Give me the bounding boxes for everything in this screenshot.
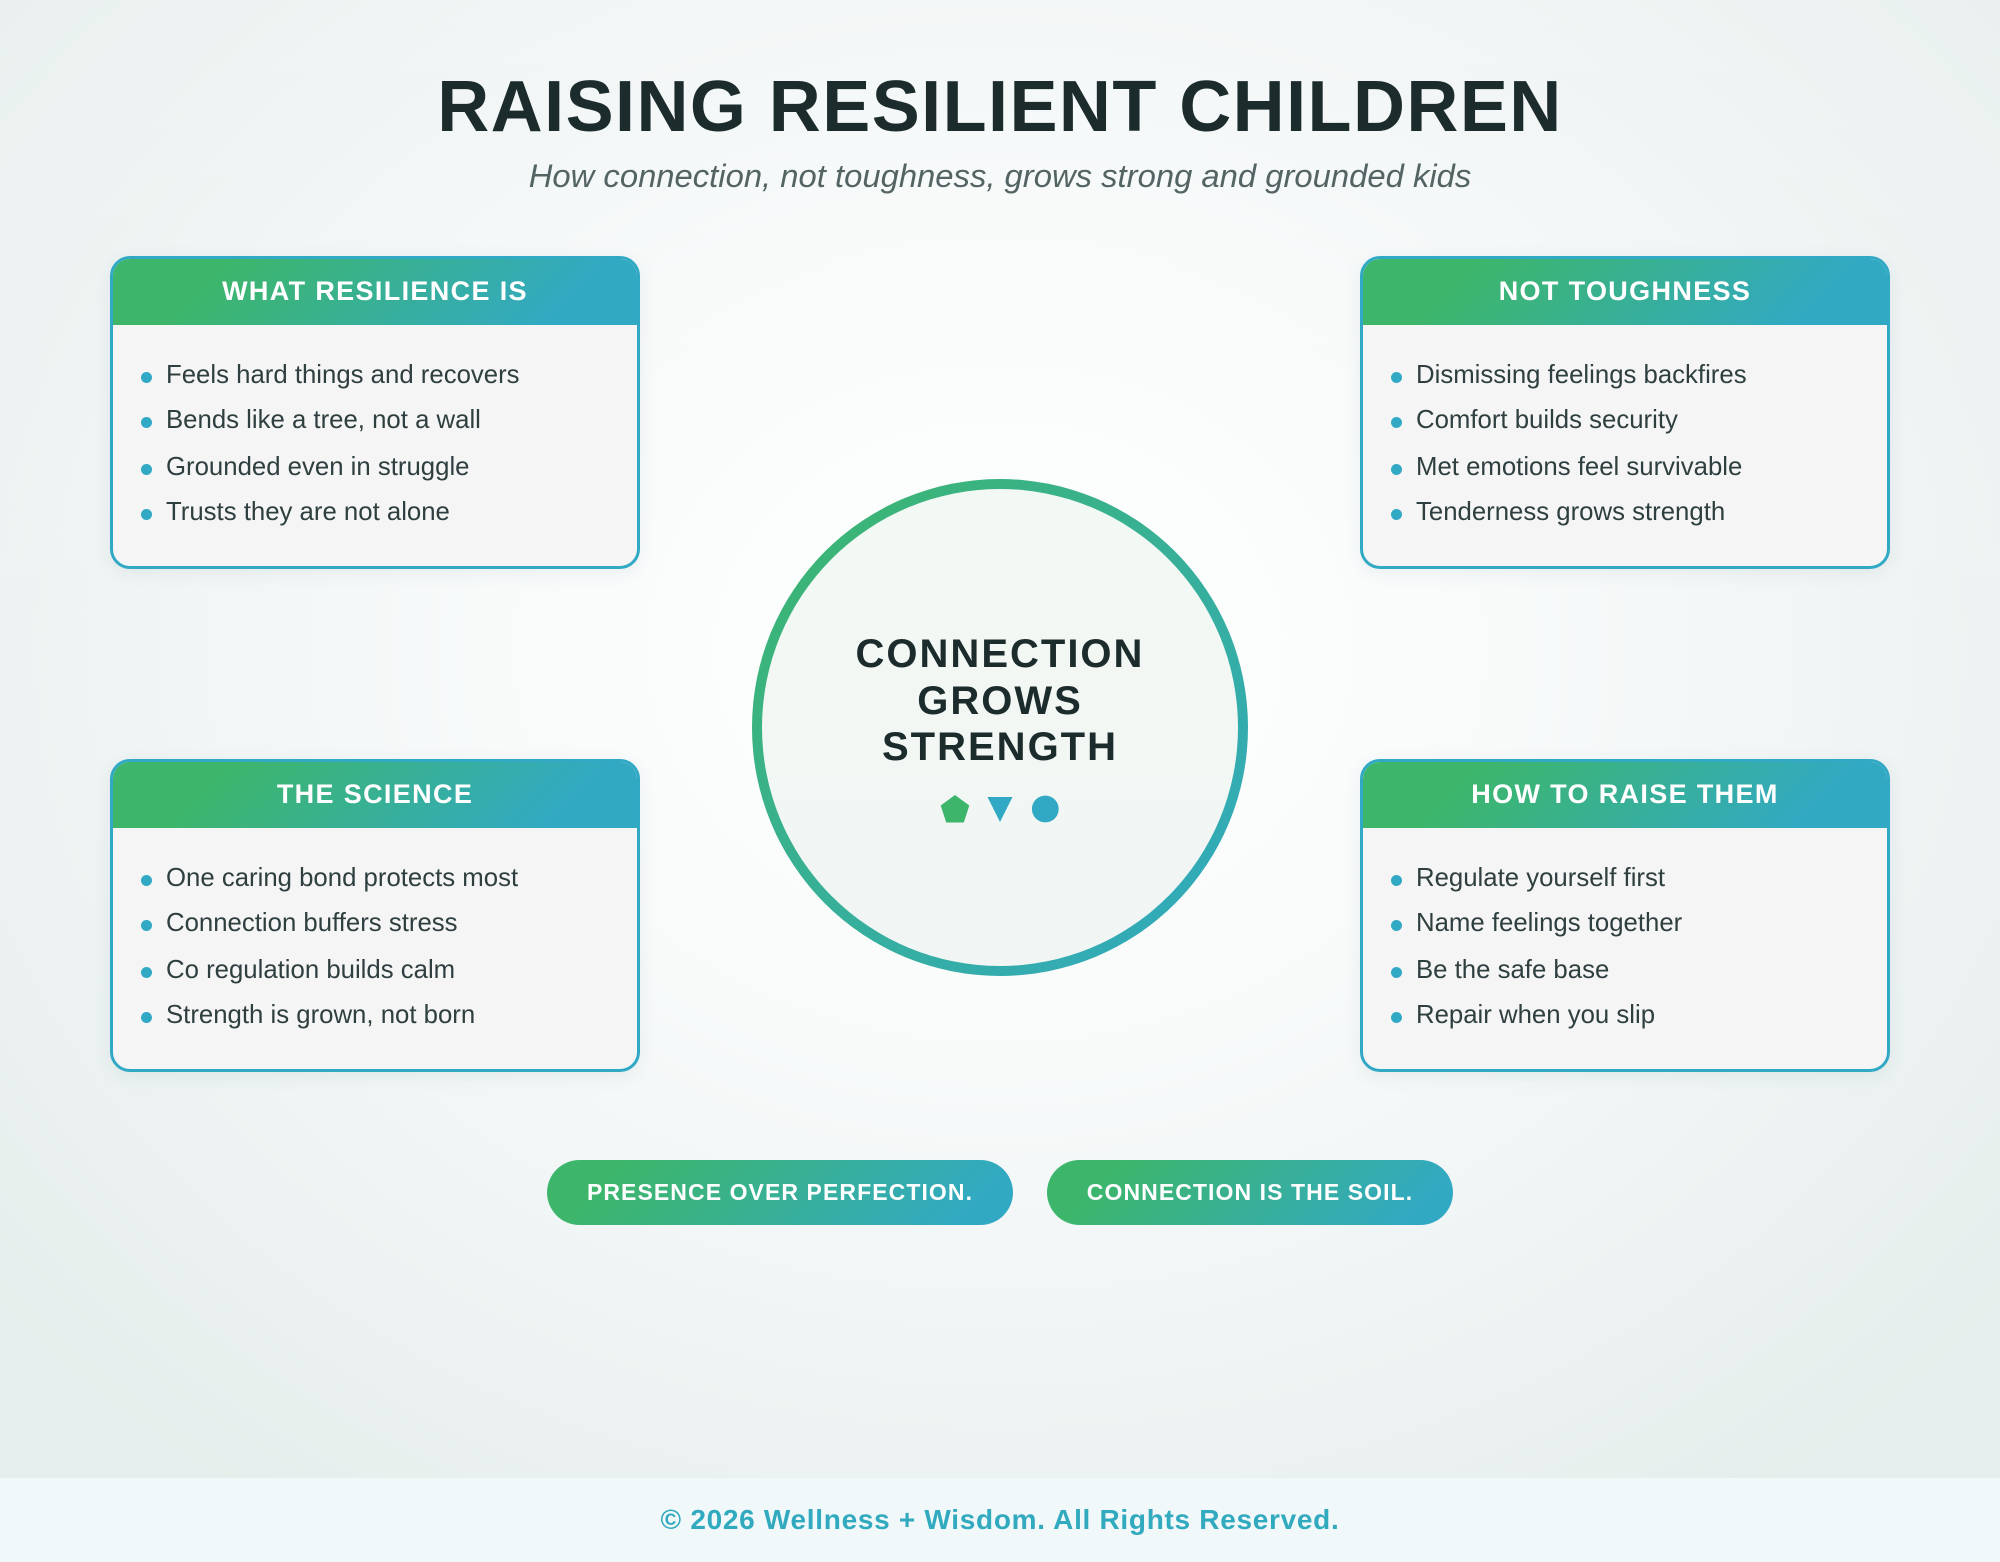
center text: CONNECTION	[856, 632, 1144, 676]
callout pill: presence over perfection	[547, 1160, 1013, 1225]
heading: the science: THE SCIENCE	[277, 779, 473, 809]
list item: Tenderness grows strength	[1416, 498, 1725, 526]
list item: Regulate yourself first	[1416, 864, 1665, 892]
list item: Bends like a tree, not a wall	[166, 406, 481, 434]
subtitle: How connection, not toughness, grows strong and grounded kids	[529, 157, 1471, 194]
list item: Met emotions feel survivable	[1416, 453, 1742, 481]
list item: Co regulation builds calm	[166, 956, 455, 984]
list item: Dismissing feelings backfires	[1416, 361, 1747, 389]
panel: how to raise them	[1360, 759, 1890, 1072]
list item: Strength is grown, not born	[166, 1001, 475, 1029]
center text: GROWS	[917, 678, 1083, 722]
list item: Trusts they are not alone	[166, 498, 450, 526]
list item: Repair when you slip	[1416, 1001, 1655, 1029]
title: RAISING RESILIENT CHILDREN	[437, 67, 1563, 147]
heading: what resilience is	[113, 259, 637, 325]
callout pill: connection is the soil: CONNECTION IS THE SOIL.	[1087, 1179, 1413, 1205]
list item: Feels hard things and recovers	[166, 361, 520, 389]
panel: not toughness	[1360, 256, 1890, 568]
list item: Comfort builds security	[1416, 406, 1678, 434]
heading: how to raise them	[1363, 762, 1887, 828]
footer	[0, 1478, 2000, 1562]
footer: © 2026 Wellness + Wisdom. All Rights Reserved.	[661, 1504, 1339, 1535]
icons: pentagon, triangle, circle	[940, 795, 1059, 822]
heading: how to raise them: HOW TO RAISE THEM	[1471, 779, 1779, 809]
center text: STRENGTH	[882, 725, 1118, 769]
list item: One caring bond protects most	[166, 864, 518, 892]
panel: the science	[110, 759, 640, 1072]
list item: Name feelings together	[1416, 909, 1682, 937]
list item: Grounded even in struggle	[166, 453, 469, 481]
list item: Connection buffers stress	[166, 909, 458, 937]
heading: not toughness	[1363, 259, 1887, 325]
central circle	[752, 479, 1248, 976]
heading: not toughness: NOT TOUGHNESS	[1499, 276, 1751, 306]
center text	[856, 632, 1144, 769]
heading: what resilience is: WHAT RESILIENCE IS	[222, 276, 528, 306]
panel: what resilience is	[110, 256, 640, 568]
list item: Be the safe base	[1416, 956, 1609, 984]
heading: the science	[113, 762, 637, 828]
callout pill: presence over perfection: PRESENCE OVER PERFECTION.	[587, 1179, 973, 1205]
callout pill: connection is the soil	[1047, 1160, 1453, 1225]
